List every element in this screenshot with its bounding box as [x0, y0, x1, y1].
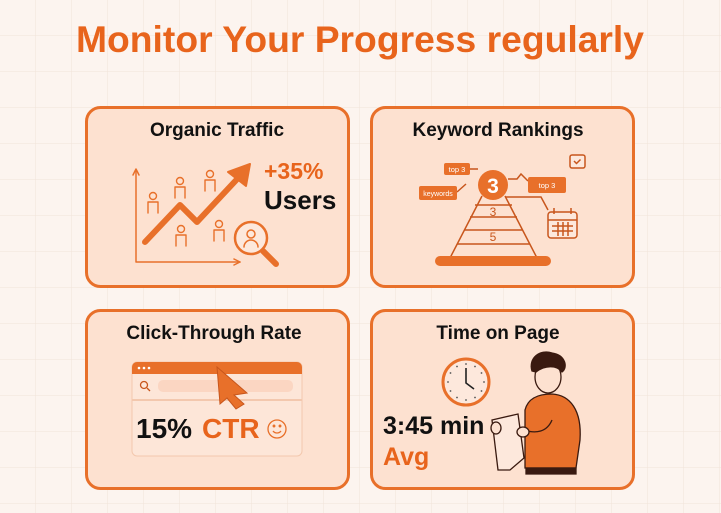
heading: keyword rankings: Keyword Rankings	[412, 120, 584, 141]
stat: +35% users: +35%	[264, 158, 323, 184]
stat: 15% CTR: 15%	[136, 413, 192, 444]
heading: click-through rate: Click-Through Rate	[126, 323, 302, 344]
stat: 3:45 min avg: 3:45 min	[383, 412, 484, 440]
label tags	[444, 163, 470, 175]
icon: cursor	[217, 367, 247, 409]
panel: time on page: Avg	[383, 443, 429, 471]
panel: keyword rankings: 3	[487, 175, 499, 198]
panel: organic traffic	[86, 108, 348, 286]
icon: magnifier	[235, 222, 267, 254]
chart: ranking pyramid	[435, 169, 551, 266]
panel: keyword rankings	[372, 108, 634, 286]
icon: smiley	[268, 420, 286, 438]
panel: keyword rankings: top 3	[539, 181, 555, 190]
panel: click-through rate: CTR	[202, 413, 260, 444]
chart: growth arrow with users	[133, 164, 276, 265]
icon: clock	[443, 359, 489, 405]
browser window	[132, 362, 302, 456]
heading: organic traffic: Organic Traffic	[150, 120, 284, 141]
panel: keyword rankings: 3	[490, 205, 497, 219]
heading: time on page: Time on Page	[436, 323, 560, 344]
illustration: person reading	[491, 352, 580, 474]
panel: keyword rankings: 5	[490, 230, 497, 244]
panel: time on page	[372, 310, 634, 488]
panel: keyword rankings: keywords	[423, 191, 453, 198]
panel: keyword rankings: top 3	[449, 165, 465, 174]
panel: organic traffic: Users	[264, 185, 336, 215]
panel: click-through rate	[86, 310, 348, 488]
title: Monitor Your Progress regularly	[76, 19, 644, 60]
icon: calendars	[548, 155, 585, 238]
